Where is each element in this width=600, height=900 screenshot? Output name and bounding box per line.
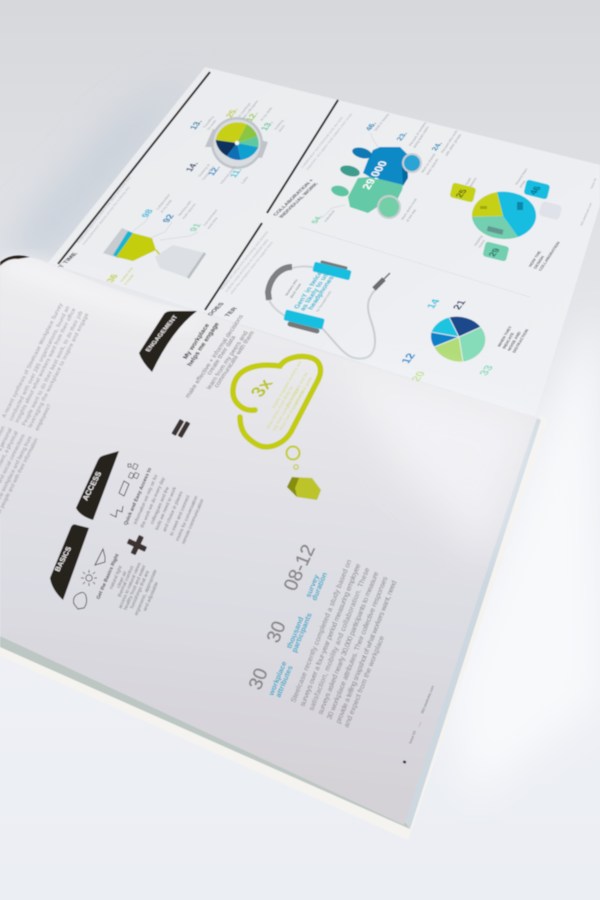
collaboration values: 46. <box>363 121 378 131</box>
watch values <box>183 107 275 178</box>
stat: workplace attributes: attributes <box>274 664 295 699</box>
small pie values: 33 <box>477 364 496 377</box>
pie captions: Quiet <box>464 178 472 185</box>
text: study description: and expect from the workplace <box>341 634 386 729</box>
page curl shadow <box>0 256 200 330</box>
audio jack <box>374 279 384 289</box>
icon: chair <box>110 506 123 517</box>
hourglass captions: Meeting with <box>177 200 193 216</box>
mint callout circle <box>377 195 401 219</box>
text: access list <box>123 467 206 545</box>
hourglass values <box>104 208 203 283</box>
small pie values: 20 <box>409 370 428 383</box>
text: intro paragraph: employees? <box>34 404 53 432</box>
page highlight near spine <box>340 362 537 560</box>
text: basics list: healthy food and water <box>123 564 148 611</box>
chart: collaboration figures <box>322 133 422 219</box>
tab: basics <box>50 524 89 600</box>
intro text: time: moving between spaces across the working day <box>81 186 131 245</box>
text: basics list: Get the Basics Right <box>96 553 121 600</box>
tab: access <box>76 451 119 520</box>
text: study description: satisfaction, mobility and collaboration. These <box>306 566 371 712</box>
small pie values <box>399 298 496 383</box>
tag: 29: 29 <box>486 247 502 257</box>
heading: collaboration: COLLABORATION + <box>272 179 316 216</box>
text: engagement intro: create their data <box>206 335 238 376</box>
text: basics list: access to natural views <box>117 561 143 610</box>
collaboration captions: Percent of workers <box>408 122 428 146</box>
cloud caption: three times more likely to <box>265 385 294 429</box>
watch values: 11. <box>227 167 244 178</box>
watch captions: alone <box>277 125 286 132</box>
watch values: 12. <box>243 111 260 122</box>
text: access list: to meet and connect <box>169 494 192 537</box>
headphones captions: Workers who <box>284 279 299 296</box>
cloud caption: culture and goals <box>292 375 314 407</box>
small pie heading: WHEN THEY <box>496 325 513 347</box>
hourglass captions: Worker time <box>119 267 134 282</box>
heading: does: DOES <box>206 302 226 316</box>
heading: time: T TIME <box>57 252 79 268</box>
blue figure <box>363 147 408 185</box>
headphones captions: block noise <box>289 283 302 298</box>
cloud caption: Highly engaged workers are <box>271 360 303 409</box>
head shape <box>287 477 321 500</box>
bright glow right of magazine <box>450 300 600 800</box>
footer of back page: Issue 63 <box>589 177 598 189</box>
text: basics list: ergonomic, appropriate <box>133 569 159 616</box>
hourglass captions: in transit <box>123 274 135 285</box>
hourglass values: 36 <box>104 273 120 283</box>
tab: access: ACCESS <box>80 470 103 502</box>
small heads <box>351 146 373 160</box>
watch captions: with colleagues <box>241 100 260 119</box>
hourglass captions: team spaces <box>181 203 197 219</box>
icon: plus sign <box>127 535 147 555</box>
collaboration captions: Percent who work <box>440 130 459 153</box>
intro text: collaboration: important, and space must support each mode <box>305 113 354 170</box>
collaboration captions: team spaces <box>425 158 440 175</box>
heading: collaboration: INDIVIDUAL WORK <box>278 182 320 218</box>
collaboration captions: doing team tasks <box>412 126 430 148</box>
text: study description: Steelcase recently completed a study based on <box>288 558 353 704</box>
icon: tent <box>95 549 105 565</box>
pie captions <box>464 168 529 248</box>
panel divider <box>300 227 530 297</box>
blue callout circle <box>402 153 422 173</box>
headphones captions: for focused work <box>315 290 333 312</box>
collaboration captions: Individual <box>323 210 336 222</box>
text: study description: surveys over a four-year period measuring employee <box>297 562 362 708</box>
icon: cloud <box>74 592 87 609</box>
cast shadow left of magazine <box>5 70 200 262</box>
text: basics list: natural light <box>108 565 124 590</box>
text: access list: remote communication <box>181 498 206 545</box>
chart: hourglass <box>103 218 205 278</box>
collaboration captions: Work alone most <box>400 198 418 220</box>
small pie values: 21 <box>451 299 469 311</box>
hourglass captions: work time <box>206 217 219 229</box>
watch captions: home office <box>201 166 216 180</box>
text: access list: colleagues and the <box>149 486 171 525</box>
intro text: collaboration: Collaboration and individual work are both <box>300 117 344 168</box>
footer of back page: 360.steelcase.com <box>579 201 593 226</box>
stat: workplace attributes <box>245 660 295 699</box>
footer of back page <box>579 177 598 226</box>
footer: front page: Issue 63 <box>408 730 417 744</box>
hourglass values: 92 <box>160 213 176 223</box>
text: engagement intro: make effective + informal decisions <box>184 314 245 399</box>
tab: basics: BASICS <box>52 545 73 573</box>
icon: thought cloud <box>233 356 321 500</box>
footer: front page: 360.steelcase.com <box>420 685 435 714</box>
intro text: does: when the workplace does not support them <box>229 241 274 294</box>
watch values: 13. <box>187 119 204 130</box>
hourglass captions <box>119 194 219 285</box>
magazine back cover and page block <box>0 415 548 840</box>
hourglass values: 98 <box>139 208 155 218</box>
cloud caption: say their workplace helps <box>271 387 301 432</box>
cloud value: 3x <box>246 376 277 399</box>
intro text: time: Employees spend less time in the office and more time <box>76 176 132 243</box>
text: access list: rooms for conversation <box>175 495 200 542</box>
text: intro paragraph: conducted with over 285 organizations, found an <box>8 306 71 422</box>
collaboration captions: of the day <box>405 209 417 222</box>
collaboration captions: Work in shared <box>420 153 437 173</box>
stat: thousand participants <box>263 611 314 654</box>
cloud caption: the company and its <box>284 371 309 407</box>
text: intro paragraph <box>1 302 90 432</box>
mint figure <box>348 177 403 213</box>
headphones callout: GenY in twice <box>293 271 324 309</box>
text: intro paragraph: People want to do their best work, to do their job <box>21 311 84 427</box>
chart: small pie <box>431 316 486 362</box>
watch values: 13. <box>258 120 275 131</box>
stat: survey duration: duration <box>310 571 329 602</box>
text: basics list: furnishings that are <box>129 569 151 609</box>
headband <box>268 266 316 319</box>
stat: thousand participants: 30 <box>263 618 291 646</box>
panel: upper back page <box>48 67 600 417</box>
tag: 25: 25 <box>453 188 469 198</box>
watch captions: Working <box>273 120 285 130</box>
tag: 29 <box>482 241 509 262</box>
watch captions: At my desk <box>259 107 274 121</box>
watch values: 25. <box>223 107 240 118</box>
small pie heading: NOISE AND <box>506 331 522 351</box>
panel: front page <box>0 256 537 825</box>
text: intro paragraph: insights about what workers want from their office <box>14 308 77 424</box>
small pie values: 12 <box>399 352 418 365</box>
text: basics list: thermal comfort <box>117 565 136 598</box>
footer: front page <box>403 685 435 764</box>
pie heading: DESIGN <box>532 255 545 269</box>
collaboration values <box>309 121 444 224</box>
tag: 46: 46 <box>527 185 543 195</box>
small pie heading <box>496 325 530 353</box>
pie captions: Shared team <box>514 168 529 185</box>
lower ear pad <box>290 324 317 331</box>
headphones callout: headphones <box>307 275 336 310</box>
watch captions <box>197 100 286 184</box>
cable <box>322 290 375 359</box>
cloud caption <box>265 360 314 432</box>
hourglass captions: Collaboration <box>155 194 171 210</box>
thought bubble small <box>294 465 298 469</box>
icon: sun <box>81 570 97 586</box>
text: study description: surveys asked nearly 30,000 participants to measure <box>315 570 380 716</box>
hourglass values: 91 <box>187 222 203 232</box>
watch captions: In meetings <box>237 102 252 117</box>
watch values: 12. <box>205 165 222 176</box>
pie captions: areas <box>518 180 527 188</box>
collaboration values: 24. <box>429 141 444 151</box>
collaboration values: 23. <box>394 131 409 141</box>
text: access list: Quick and Easy Access to <box>123 467 153 526</box>
text: intro paragraph: leveraging the workplace to inspire and engage <box>27 313 90 429</box>
heading: does: TER <box>223 306 240 317</box>
upper ear pad <box>322 262 346 268</box>
watch captions: Travelling <box>202 116 215 128</box>
tag: 46 <box>523 179 550 200</box>
text: access list: the work we do every day <box>139 476 167 529</box>
stat: thousand participants: participants <box>290 611 314 654</box>
stat: survey duration: 08-12 <box>280 542 320 594</box>
text: access list: and choice in places <box>162 490 185 533</box>
text: access list: information we rely on for <box>133 473 160 525</box>
text: basics list <box>96 553 160 616</box>
text: engagement intro: communicate with them <box>213 330 256 389</box>
text: study description <box>288 558 398 729</box>
chart: large pie <box>472 192 536 239</box>
small pie heading: INDICATE <box>501 332 515 349</box>
watch values: 14. <box>183 161 200 172</box>
pie captions: rooms <box>477 239 486 248</box>
hourglass captions: Concentrated <box>202 209 219 226</box>
watch captions: Cafes <box>240 176 250 184</box>
collaboration captions: with other groups <box>444 133 462 156</box>
pie heading: COLLABORATION <box>537 241 561 271</box>
text: access list: tools we need to work <box>154 486 178 531</box>
headphones captions <box>284 279 333 312</box>
text: engagement intro: helps me engage <box>186 321 221 367</box>
text: engagement intro: My workplace <box>182 322 212 360</box>
stat: workplace attributes: 30 <box>245 665 273 693</box>
text: engagement intro: learn from my peers and <box>205 330 250 390</box>
heading: does <box>206 302 240 317</box>
icon: headphones <box>268 262 390 359</box>
watch captions: Working at <box>197 164 211 177</box>
hourglass captions: at my desk <box>159 199 173 213</box>
pie heading: HOW THE <box>527 250 542 267</box>
text: basics list: and adjustable <box>142 581 160 612</box>
pie captions: spaces <box>468 177 478 187</box>
figure total: 29,000 <box>360 160 390 191</box>
icon: grid <box>128 463 139 479</box>
icon: watch straps <box>205 129 268 158</box>
small pie values: 14 <box>425 298 443 310</box>
text: study description: 30 workplace attributes. Their collective responses <box>324 575 390 721</box>
tab: engagement <box>139 311 197 372</box>
stat: workplace attributes: workplace <box>266 660 289 698</box>
stat: survey duration: survey <box>304 572 321 599</box>
icon: tablet <box>119 481 129 496</box>
section rules <box>58 72 338 310</box>
collaboration captions <box>323 113 462 222</box>
small pie heading: DISTRACTION <box>511 329 530 353</box>
chart: watch time wheel <box>205 117 268 169</box>
headphones callout: as likely to use <box>299 270 333 311</box>
watch captions: Informal space <box>219 166 237 184</box>
tab: engagement: ENGAGEMENT <box>144 314 180 353</box>
collaboration captions: Work in teams <box>373 113 391 131</box>
stat: thousand participants: thousand <box>285 615 306 650</box>
intro text: does: Workers are using more technology and devices <box>219 231 269 290</box>
curled dark tab <box>0 255 30 266</box>
pie captions: Meeting <box>473 235 484 246</box>
collaboration values: 54. <box>309 214 324 224</box>
text: basics list: clean air <box>116 570 129 589</box>
tag: 25 <box>449 182 476 203</box>
thought bubble large <box>286 446 300 460</box>
text: intro paragraph: A recent synthesis of Steelcase Workplace Survey <box>1 302 65 419</box>
cloud caption: them feel engaged with <box>278 390 306 431</box>
watch captions: for work <box>206 120 218 130</box>
intro text: does: to block noise and focus on individual tasks <box>224 239 270 292</box>
icon: equals sign <box>171 419 190 438</box>
text: study description: provide a telling snapshot of what workers want, need <box>333 579 398 725</box>
tag: blank <box>538 201 562 220</box>
